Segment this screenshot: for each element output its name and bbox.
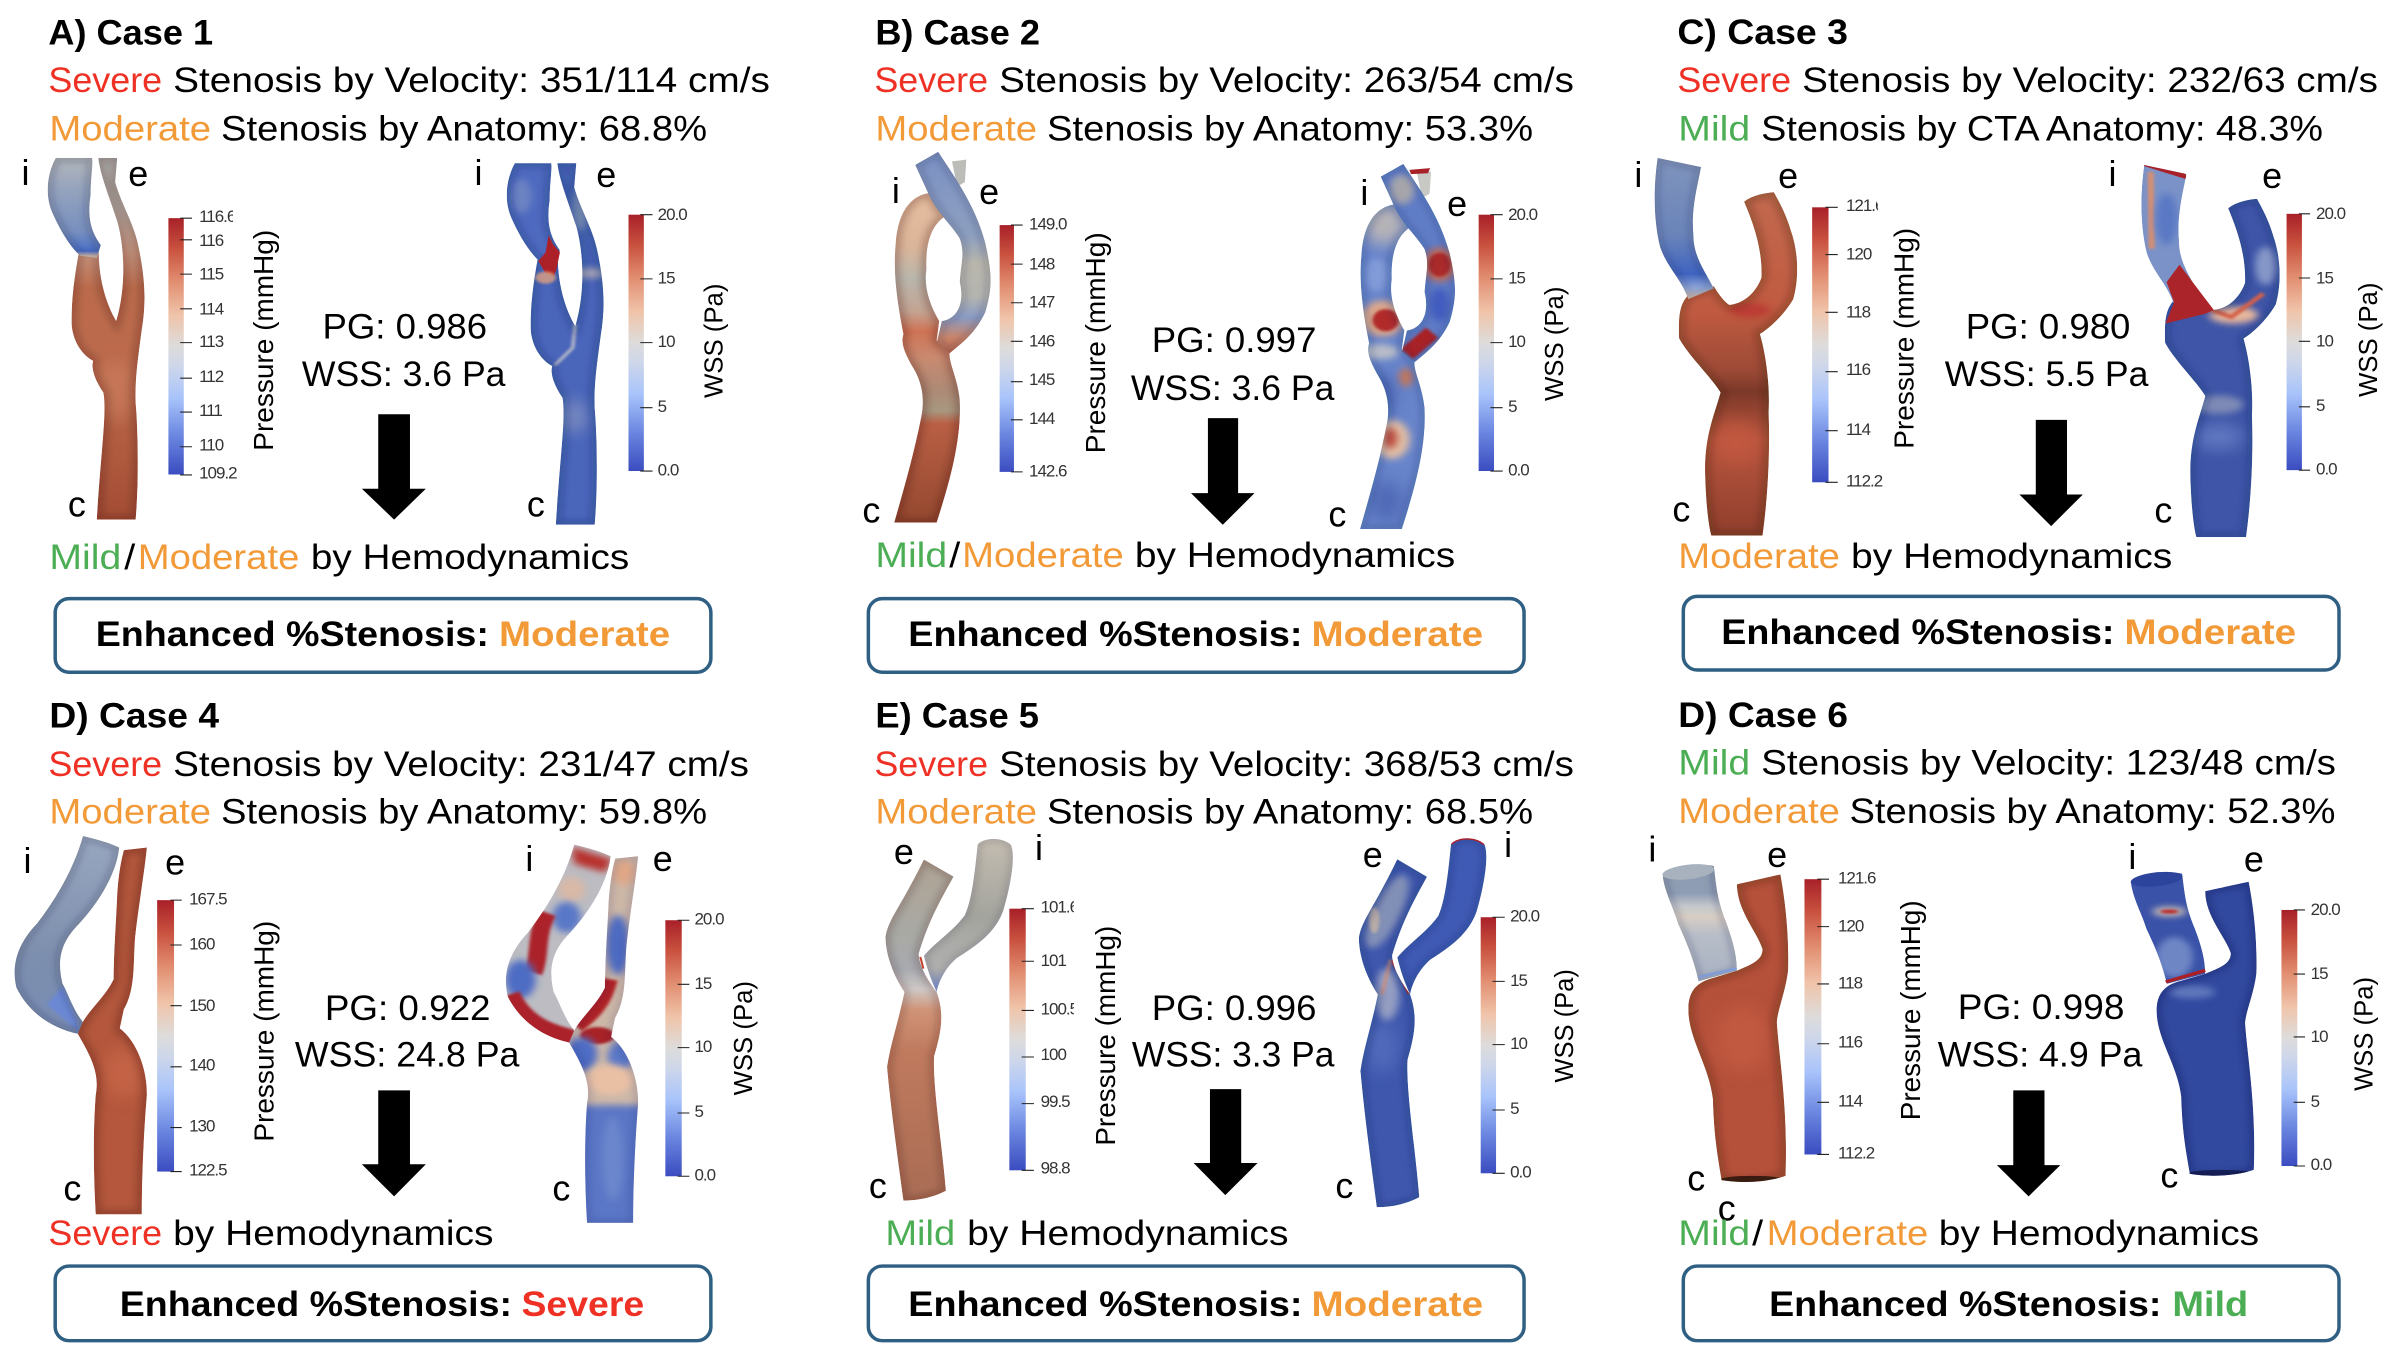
anatomy stenosis line: Mild [1678,109,1750,148]
hemodynamics line: / [949,536,961,575]
arrow [2019,420,2083,526]
anatomy stenosis line: Stenosis by Anatomy: 68.8% [221,109,707,148]
arrow [1997,1090,2060,1196]
pressure colorbar: 116 [1846,360,1871,379]
pressure colorbar [1804,869,1876,1163]
hemodynamics line: by Hemodynamics [173,1214,494,1253]
hemodynamics line: by Hemodynamics [1939,1214,2259,1253]
PG and WSS values [1131,321,1335,408]
hemodynamics line [875,536,1455,575]
PG and WSS values: WSS: 4.9 Pa [1938,1036,2143,1075]
enhanced stenosis box [1683,596,2339,670]
panel: Case 5 [868,697,1579,1341]
WSS colorbar: 10 [1510,1034,1528,1053]
vessel labels: pressure: e [894,832,914,872]
anatomy stenosis line: Stenosis by CTA Anatomy: 48.3% [1761,109,2323,148]
vessel labels: pressure: e [165,843,185,883]
WSS colorbar: 5 [1510,1099,1519,1118]
arrow [362,1090,426,1196]
pressure colorbar [1812,193,1890,491]
vessel labels: WSS: e [1363,835,1383,875]
anatomy stenosis line: Stenosis by Anatomy: 53.3% [1047,109,1533,148]
PG and WSS values: WSS: 3.3 Pa [1132,1036,1335,1075]
PG and WSS values: PG: 0.980 [1966,307,2130,346]
pressure colorbar: 112.2 [1846,472,1883,491]
WSS colorbar: 0.0 [1510,1163,1531,1181]
pressure colorbar: 130 [189,1116,215,1135]
hemodynamics line: by Hemodynamics [1851,537,2172,576]
pressure colorbar: 114 [1838,1092,1863,1111]
PG and WSS values: PG: 0.997 [1152,321,1316,360]
pressure vessel model [894,152,991,523]
pressure colorbar: 114 [1846,420,1871,439]
WSS colorbar: 15 [1508,269,1526,288]
PG and WSS values: WSS: 3.6 Pa [302,355,506,394]
WSS colorbar: 5 [2311,1092,2320,1111]
vessel labels: pressure [1634,155,1798,529]
vessel labels: WSS: c [552,1168,570,1208]
vessel labels: pressure: i [21,153,29,193]
PG and WSS values: WSS: 3.6 Pa [1131,369,1335,408]
pressure colorbar: 122.5 [189,1161,227,1180]
pressure colorbar: 118 [1846,302,1871,321]
vessel labels: WSS: e [2244,840,2264,880]
anatomy stenosis line [875,792,1533,831]
velocity stenosis line: Mild [1678,744,1750,783]
WSS colorbar [2287,204,2346,479]
enhanced stenosis box [1683,1266,2339,1341]
WSS colorbar: 15 [2316,269,2333,288]
WSS colorbar: 20.0 [1510,907,1540,925]
WSS axis label: WSS (Pa) [701,284,729,398]
pressure colorbar: 167.5 [189,889,227,908]
WSS colorbar: 10 [658,332,675,351]
enhanced stenosis box: Moderate [499,615,670,654]
hemodynamics line: / [1752,1214,1764,1253]
hemodynamics line [48,1214,494,1253]
pressure colorbar: 160 [189,935,215,954]
vessel labels: WSS: e [653,839,673,879]
vessel labels: pressure: i [23,841,31,881]
WSS colorbar [1479,205,1538,480]
velocity stenosis line: Stenosis by Velocity: 263/54 cm/s [999,61,1574,100]
velocity stenosis line: Severe [874,745,988,784]
enhanced stenosis box [55,599,711,672]
hemodynamics line: by Hemodynamics [967,1214,1289,1253]
vessel labels: WSS: e [596,155,616,195]
enhanced stenosis box [868,1266,1524,1341]
WSS colorbar: 15 [1510,971,1528,990]
WSS colorbar: 5 [2316,396,2325,415]
vessel labels: pressure [869,828,1043,1206]
PG and WSS values: WSS: 24.8 Pa [295,1036,520,1075]
PG and WSS values [295,989,520,1075]
panel: Case 6 [1648,696,2379,1341]
wall shear stress vessel model [1359,164,1457,529]
pressure colorbar: 111 [199,401,222,420]
vessel labels: pressure: c [1718,1188,1736,1228]
wall shear stress vessel model [2130,870,2257,1178]
hemodynamics line: Moderate [1678,537,1840,576]
vessel labels: pressure: c [869,1166,887,1206]
PG and WSS values: WSS: 5.5 Pa [1945,355,2149,394]
vessel labels: pressure: c [862,490,880,530]
vessel labels: WSS: i [475,153,483,193]
enhanced stenosis box [868,599,1524,672]
vessel labels: pressure: e [1767,835,1787,875]
hemodynamics line: / [124,538,136,577]
pressure colorbar: 101.6 [1041,898,1079,917]
vessel labels: pressure: i [1634,155,1642,195]
pressure axis label: Pressure (mmHg) [248,921,279,1142]
WSS colorbar: 0.0 [2311,1155,2332,1174]
velocity stenosis line: Stenosis by Velocity: 123/48 cm/s [1761,744,2336,783]
pressure colorbar [1000,214,1067,481]
vessel labels: pressure: c [68,484,86,524]
WSS colorbar: 0.0 [1508,461,1529,480]
pressure colorbar: 101 [1041,951,1067,970]
vessel labels: WSS: c [1328,494,1346,534]
hemodynamics line: Mild [885,1214,955,1253]
vessel labels: pressure [21,153,148,524]
PG and WSS values: PG: 0.996 [1152,989,1316,1028]
WSS colorbar: 5 [1508,397,1517,416]
pressure axis label: Pressure (mmHg) [1888,228,1919,449]
enhanced stenosis box: Mild [2172,1285,2248,1324]
arrow [362,414,426,520]
pressure colorbar: 145 [1029,370,1055,389]
vessel labels: pressure: e [128,154,148,194]
pressure vessel model [1655,158,1797,536]
velocity stenosis line: Severe [1677,61,1791,100]
WSS colorbar: 20.0 [658,205,687,224]
vessel labels: WSS: i [1504,825,1512,865]
pressure vessel model [48,158,145,520]
enhanced stenosis box [55,1266,711,1341]
vessel labels: pressure: e [1778,156,1798,196]
pressure colorbar: 100.5 [1041,999,1079,1018]
hemodynamics line: Moderate [138,538,299,577]
pressure colorbar: 109.2 [199,464,237,483]
WSS colorbar [2281,900,2340,1174]
wall shear stress vessel model [1356,838,1486,1207]
arrow [1191,418,1254,525]
PG and WSS values [302,307,506,394]
WSS axis label: WSS (Pa) [1541,287,1569,401]
WSS colorbar [1481,907,1540,1181]
hemodynamics line [1678,537,2172,576]
WSS axis label: WSS (Pa) [2355,283,2383,397]
pressure colorbar: 110 [199,436,224,455]
pressure axis label: Pressure (mmHg) [248,230,279,451]
vessel labels: WSS [475,153,616,524]
pressure colorbar: 112.2 [1838,1144,1875,1163]
WSS colorbar: 0.0 [2316,460,2337,479]
anatomy stenosis line: Moderate [49,792,211,831]
vessel labels: WSS [1328,173,1467,534]
vessel labels: WSS: i [2108,154,2116,194]
vessel labels: WSS: c [527,484,545,524]
vessel labels: pressure: c [1672,489,1690,529]
PG and WSS values: PG: 0.998 [1958,988,2124,1027]
pressure colorbar: 147 [1029,292,1055,311]
vessel labels: WSS [1335,825,1512,1206]
WSS colorbar: 10 [2311,1027,2328,1046]
anatomy stenosis line: Moderate [875,792,1037,831]
WSS axis label: WSS (Pa) [1551,969,1579,1083]
vessel labels: pressure: c [63,1168,81,1208]
velocity stenosis line: Stenosis by Velocity: 232/63 cm/s [1802,61,2378,100]
WSS colorbar: 10 [2316,331,2333,350]
velocity stenosis line: Stenosis by Velocity: 231/47 cm/s [173,745,749,784]
WSS colorbar: 20.0 [2311,900,2340,919]
WSS colorbar: 5 [695,1102,704,1121]
enhanced stenosis box: Severe [521,1285,644,1324]
pressure colorbar: 121.6 [1846,196,1884,215]
hemodynamics line [1678,1214,2259,1253]
pressure colorbar: 146 [1029,331,1055,350]
WSS colorbar: 10 [1508,332,1526,351]
vessel labels: pressure [862,171,999,530]
enhanced stenosis box: Enhanced %Stenosis: [96,615,489,654]
pressure colorbar: 148 [1029,255,1055,274]
WSS colorbar: 15 [2311,964,2328,983]
title: D) Case 4 [49,697,220,736]
PG and WSS values: PG: 0.986 [322,307,487,346]
WSS colorbar: 5 [658,397,667,416]
title: B) Case 2 [875,13,1040,52]
anatomy stenosis line [875,109,1533,148]
WSS colorbar: 20.0 [695,909,724,928]
pressure colorbar: 150 [189,996,215,1015]
pressure colorbar [1009,895,1086,1178]
vessel labels: WSS [525,839,673,1208]
pressure colorbar: 115 [199,265,224,284]
pressure colorbar: 120 [1846,245,1872,264]
pressure colorbar: 144 [1029,409,1055,428]
pressure colorbar: 142.6 [1029,462,1067,481]
pressure colorbar: 114 [199,299,224,318]
WSS colorbar: 15 [695,974,712,993]
vessel labels: WSS [2128,837,2264,1195]
vessel labels: WSS [2108,154,2282,530]
pressure colorbar: 112 [199,367,224,386]
vessel labels: WSS: i [1360,173,1368,213]
velocity stenosis line: Severe [48,745,162,784]
WSS colorbar [665,909,724,1184]
enhanced stenosis box: Moderate [1311,615,1483,654]
enhanced stenosis box: Enhanced %Stenosis: [1721,613,2114,652]
panel: Case 3 [1634,13,2383,670]
pressure colorbar: 99.5 [1041,1092,1070,1111]
WSS colorbar: 0.0 [695,1166,716,1184]
pressure vessel model [15,836,147,1214]
anatomy stenosis line: Moderate [49,109,211,148]
arrow [1194,1089,1258,1195]
hemodynamics line: Moderate [1767,1214,1928,1253]
anatomy stenosis line [49,109,707,148]
anatomy stenosis line [49,792,707,831]
hemodynamics line: Mild [875,536,947,575]
anatomy stenosis line: Moderate [875,109,1037,148]
velocity stenosis line: Stenosis by Velocity: 351/114 cm/s [173,61,770,100]
pressure colorbar: 140 [189,1056,215,1075]
vessel labels: pressure: e [979,172,999,212]
panel: Case 2 [862,13,1574,672]
pressure colorbar: 121.6 [1838,869,1876,887]
hemodynamics line: by Hemodynamics [1135,536,1455,575]
vessel labels: WSS: i [525,839,533,879]
PG and WSS values [1945,307,2149,394]
vessel labels: pressure: i [1035,828,1043,868]
pressure colorbar: 118 [1838,973,1863,992]
velocity stenosis line: Severe [874,61,988,100]
vessel labels: pressure [1648,830,1787,1228]
pressure colorbar: 116 [1838,1033,1863,1052]
WSS axis label: WSS (Pa) [730,981,758,1095]
pressure colorbar: 116.6 [199,207,236,226]
pressure colorbar: 100 [1041,1045,1067,1064]
anatomy stenosis line: Stenosis by Anatomy: 68.5% [1047,792,1533,831]
pressure colorbar: 116 [199,231,224,250]
PG and WSS values [1938,988,2143,1075]
pressure axis label: Pressure (mmHg) [1080,232,1111,453]
vessel labels: WSS: c [2154,490,2172,530]
WSS axis label: WSS (Pa) [2350,977,2379,1091]
title: A) Case 1 [48,13,213,52]
vessel labels: WSS: c [1335,1166,1353,1206]
WSS colorbar: 20.0 [1508,205,1538,224]
pressure vessel model [1661,862,1788,1184]
hemodynamics line: Mild [49,538,121,577]
panel: Case 4 [15,697,758,1341]
pressure colorbar [157,889,227,1180]
hemodynamics line: by Hemodynamics [311,538,629,577]
title: C) Case 3 [1677,13,1848,52]
PG and WSS values: PG: 0.922 [325,989,491,1028]
anatomy stenosis line [1678,792,2336,831]
pressure colorbar: 98.8 [1041,1159,1070,1178]
PG and WSS values [1132,989,1335,1075]
anatomy stenosis line: Moderate [1678,792,1840,831]
pressure colorbar [168,204,243,483]
vessel labels: pressure [23,841,185,1208]
enhanced stenosis box: Enhanced %Stenosis: [120,1285,512,1324]
WSS colorbar: 15 [658,269,675,288]
vessel labels: pressure: i [892,171,900,211]
anatomy stenosis line: Stenosis by Anatomy: 52.3% [1849,792,2336,831]
title: E) Case 5 [875,697,1039,736]
enhanced stenosis box: Enhanced %Stenosis: [908,615,1302,654]
wall shear stress vessel model [504,845,643,1234]
velocity stenosis line: Stenosis by Velocity: 368/53 cm/s [999,745,1574,784]
WSS colorbar: 0.0 [658,461,679,480]
title: D) Case 6 [1678,696,1848,735]
pressure colorbar: 149.0 [1029,214,1067,233]
pressure colorbar: 113 [199,332,224,351]
pressure vessel model [886,839,1013,1201]
enhanced stenosis box: Enhanced %Stenosis: [1769,1285,2161,1324]
WSS colorbar: 20.0 [2316,204,2346,223]
panel: Case 1 [21,13,770,672]
vessel labels: WSS: c [2160,1155,2178,1195]
vessel labels: WSS: e [2262,156,2282,196]
WSS colorbar: 10 [695,1037,712,1056]
vessel labels: pressure: i [1648,830,1656,870]
WSS colorbar [628,205,687,480]
anatomy stenosis line: Stenosis by Anatomy: 59.8% [221,792,707,831]
hemodynamics line [49,538,629,577]
hemodynamics line: Moderate [962,536,1124,575]
vessel labels: pressure: c [1687,1158,1705,1198]
vessel labels: WSS: i [2128,837,2136,877]
enhanced stenosis box: Moderate [1311,1285,1483,1324]
wall shear stress vessel model [507,163,605,525]
hemodynamics line: Severe [48,1214,162,1253]
wall shear stress vessel model [2141,160,2280,537]
enhanced stenosis box: Enhanced %Stenosis: [908,1285,1302,1324]
pressure axis label: Pressure (mmHg) [1090,926,1121,1146]
enhanced stenosis box: Moderate [2124,613,2296,652]
velocity stenosis line: Severe [48,61,162,100]
vessel labels: WSS: e [1447,184,1467,224]
pressure colorbar: 120 [1838,917,1864,936]
hemodynamics line: Mild [1678,1214,1750,1253]
pressure axis label: Pressure (mmHg) [1895,900,1926,1120]
